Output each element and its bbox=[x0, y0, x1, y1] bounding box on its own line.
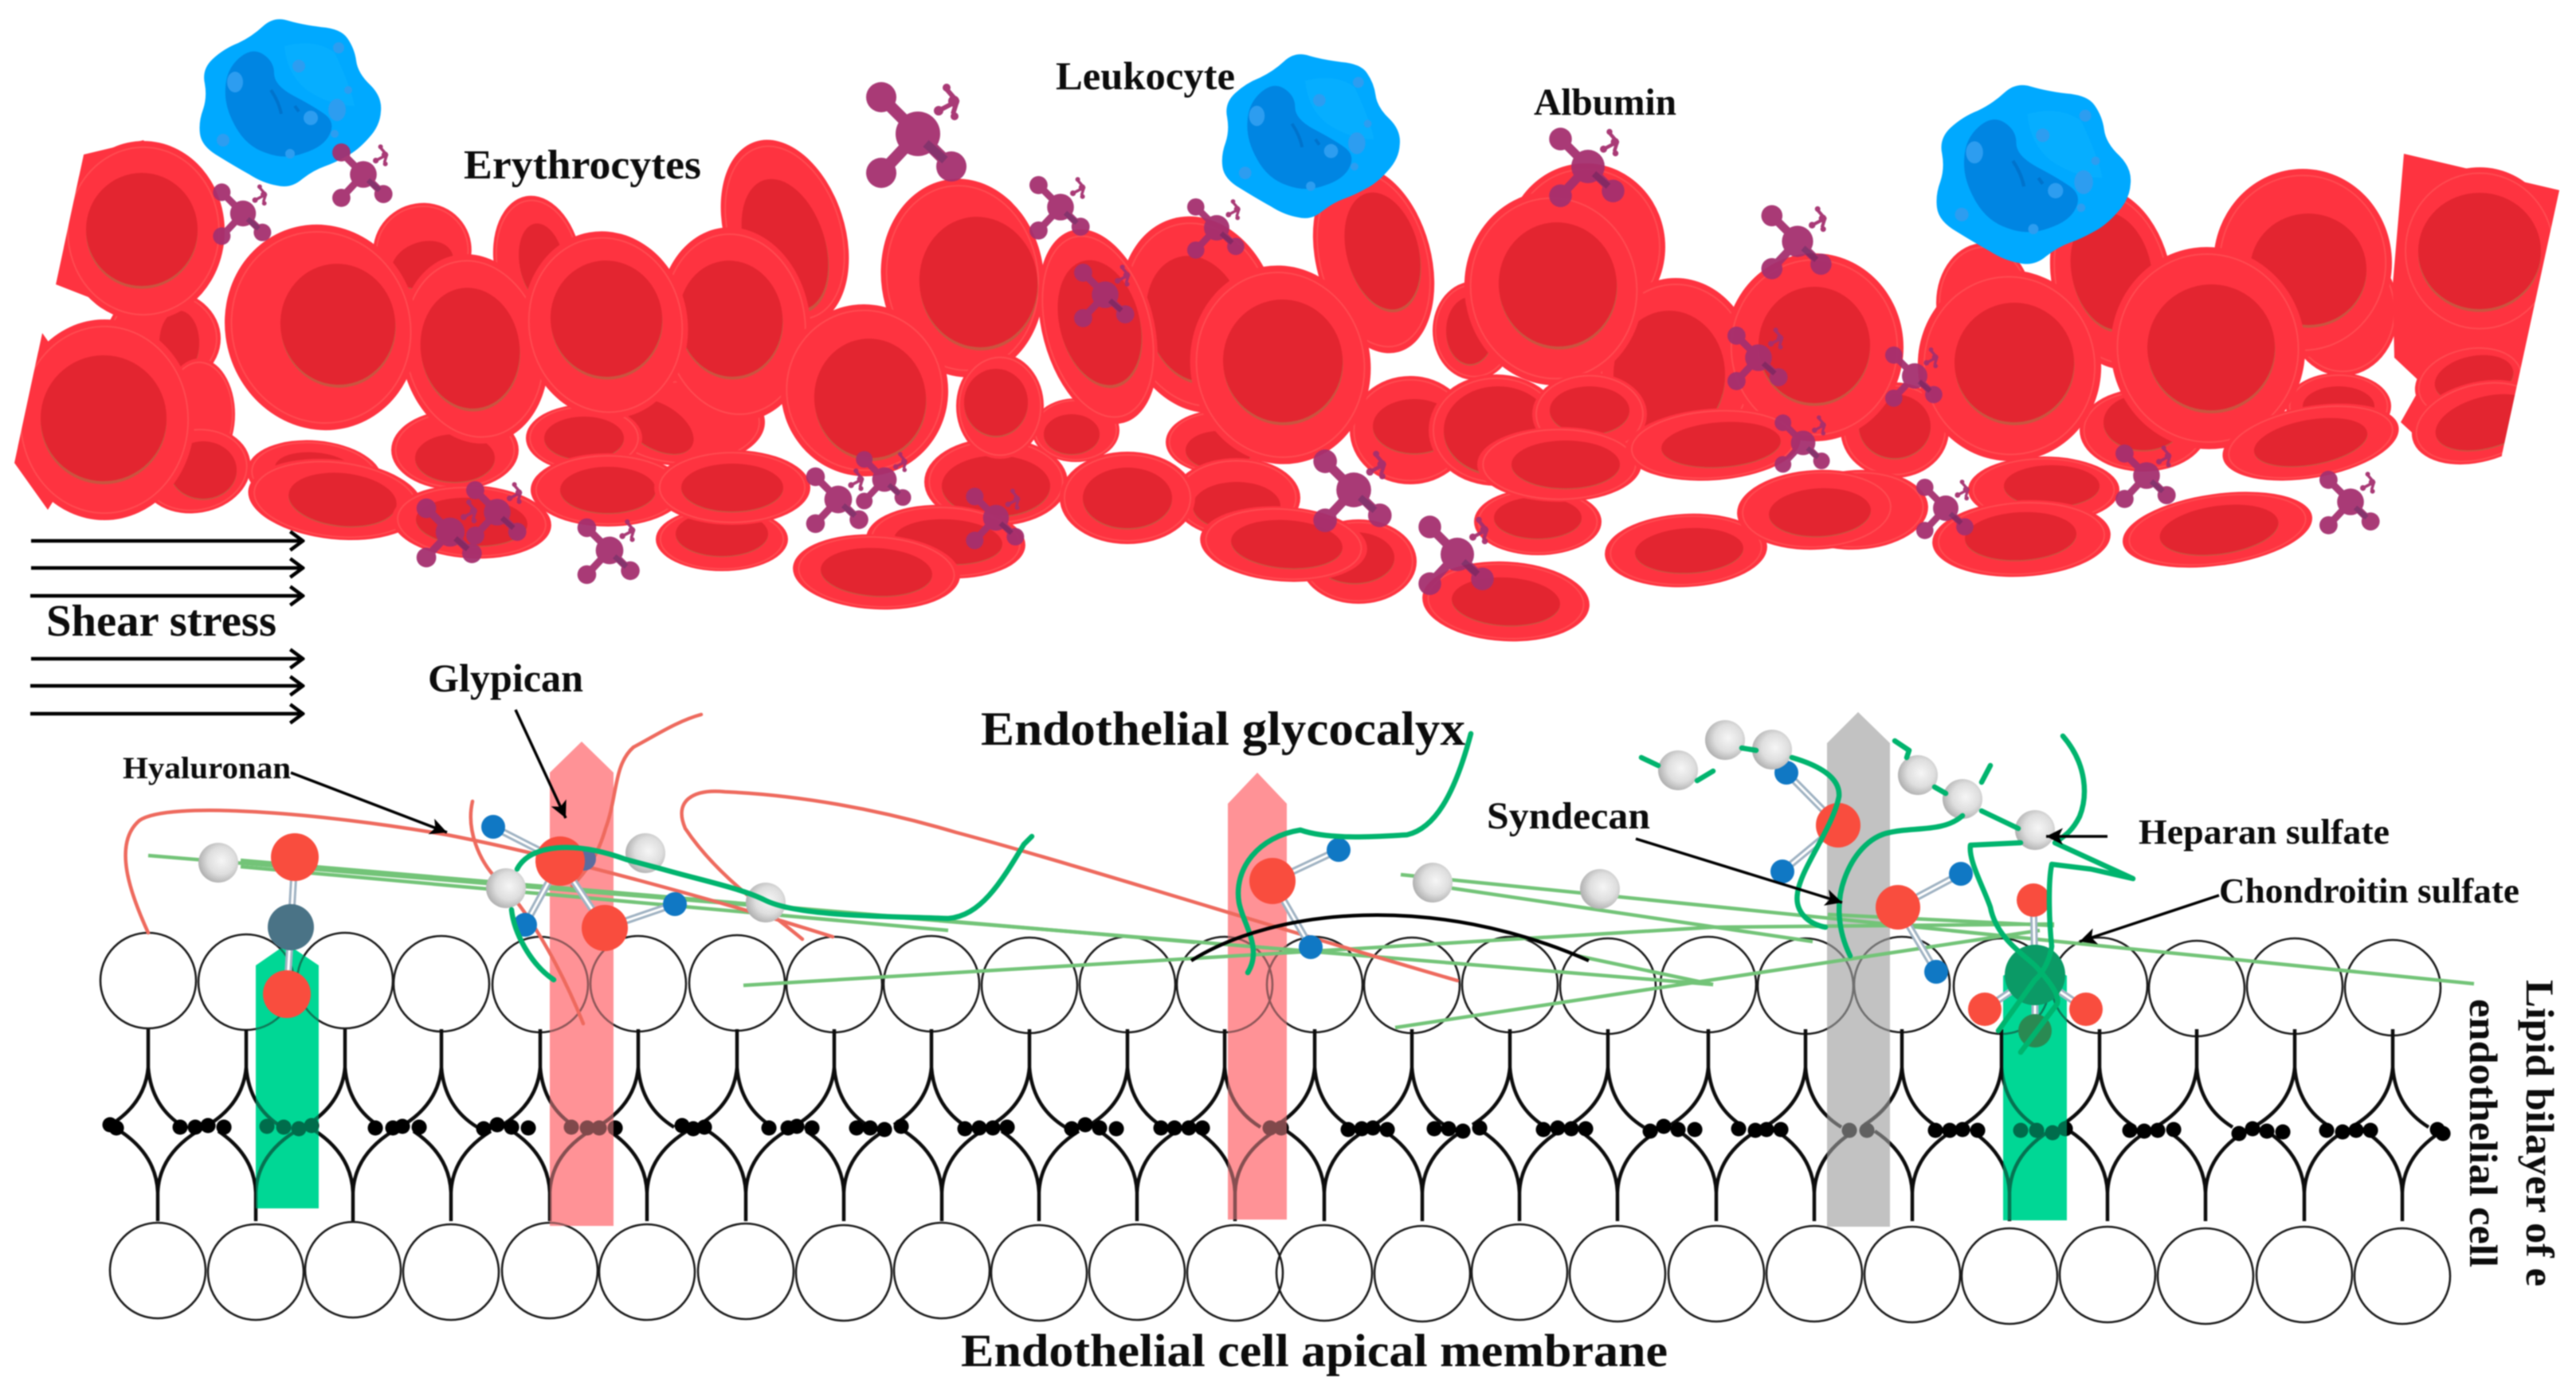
bottom phospholipid heads bbox=[110, 1222, 2450, 1324]
label: Chondroitin sulfate: Chondroitin sulfate bbox=[2219, 871, 2519, 910]
dark green spheres bbox=[2005, 945, 2065, 1047]
bar: syndecan gray bbox=[1827, 712, 1890, 1227]
albumin molecules bbox=[213, 82, 2380, 595]
bonds bbox=[287, 773, 2086, 1031]
label: Shear stress: Shear stress bbox=[46, 597, 276, 646]
arrow: Hyaluronan bbox=[291, 773, 447, 832]
label: Lipid bilayer of endothelial cell: endothelial cell bbox=[2461, 999, 2506, 1267]
top phospholipid heads bbox=[100, 933, 2441, 1036]
black chain bbox=[1191, 915, 1589, 961]
leukocyte middle bbox=[1222, 54, 1400, 218]
light green chains bbox=[148, 856, 2474, 1028]
gray spheres bbox=[198, 720, 2055, 922]
heading: Endothelial glycocalyx: Endothelial glycocalyx bbox=[981, 703, 1465, 755]
heparan and chondroitin sulfate chains bbox=[512, 734, 2133, 1052]
bar: green right bbox=[2003, 956, 2067, 1220]
blue spheres bbox=[481, 761, 1973, 984]
label: Hyaluronan: Hyaluronan bbox=[123, 751, 291, 785]
label: Albumin: Albumin bbox=[1534, 81, 1676, 123]
arrow: Chondroitin sulfate bbox=[2080, 895, 2219, 942]
lipid tails bbox=[111, 1029, 2442, 1221]
leukocyte left bbox=[199, 19, 381, 186]
label: Lipid bilayer of endothelial cell bbox=[2461, 980, 2562, 1286]
bar: green left bbox=[256, 944, 319, 1208]
leukocyte right bbox=[1936, 85, 2131, 264]
arrow: Glypican bbox=[516, 710, 566, 818]
bar: pink middle bbox=[1228, 773, 1287, 1220]
bar tint over lipids bbox=[256, 712, 2067, 1227]
label: Erythrocytes: Erythrocytes bbox=[464, 143, 701, 188]
arrow: Heparan sulfate bbox=[2046, 835, 2107, 838]
teal sphere bbox=[268, 904, 314, 950]
heading: Endothelial cell apical membrane: Endothelial cell apical membrane bbox=[961, 1325, 1668, 1376]
label: Heparan sulfate: Heparan sulfate bbox=[2139, 813, 2390, 852]
label: Leukocyte: Leukocyte bbox=[1056, 53, 1235, 98]
label: Syndecan: Syndecan bbox=[1487, 795, 1650, 837]
transmembrane bars, opaque layer bbox=[256, 712, 2067, 1227]
arrow: Syndecan bbox=[1636, 839, 1842, 903]
lipid bilayer bbox=[100, 933, 2450, 1324]
label: Glypican: Glypican bbox=[428, 656, 583, 700]
lipid mid-plane dots bbox=[110, 1125, 2443, 1134]
hyaluronan coral chains bbox=[126, 715, 1457, 1024]
leukocytes bbox=[199, 19, 2131, 264]
bar: glypican pink bbox=[550, 742, 614, 1226]
red spheres bbox=[263, 803, 2103, 1026]
shear stress arrows bbox=[30, 541, 303, 714]
erythrocytes: red blood cell layer bbox=[0, 123, 2576, 645]
label: Lipid bilayer of endothelial cell: Lipid bilayer of e bbox=[2518, 980, 2562, 1286]
